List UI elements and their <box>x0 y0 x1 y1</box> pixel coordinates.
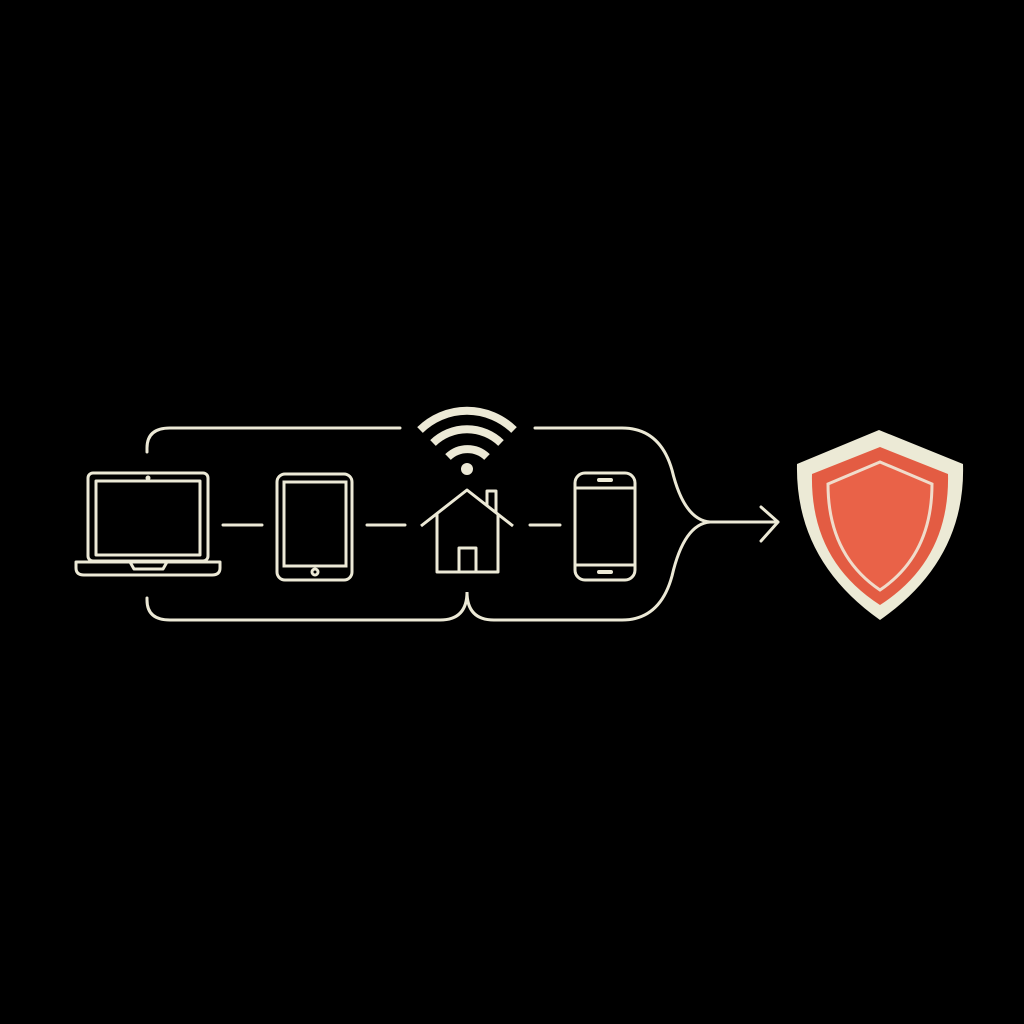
icon: shield <box>797 430 963 620</box>
icon: house <box>421 490 513 572</box>
icon: wifi <box>420 411 514 475</box>
arrow <box>708 507 778 541</box>
network connection lines <box>147 428 710 620</box>
icon: phone <box>575 473 635 580</box>
icon: tablet <box>277 474 352 580</box>
icon: laptop <box>76 473 220 575</box>
